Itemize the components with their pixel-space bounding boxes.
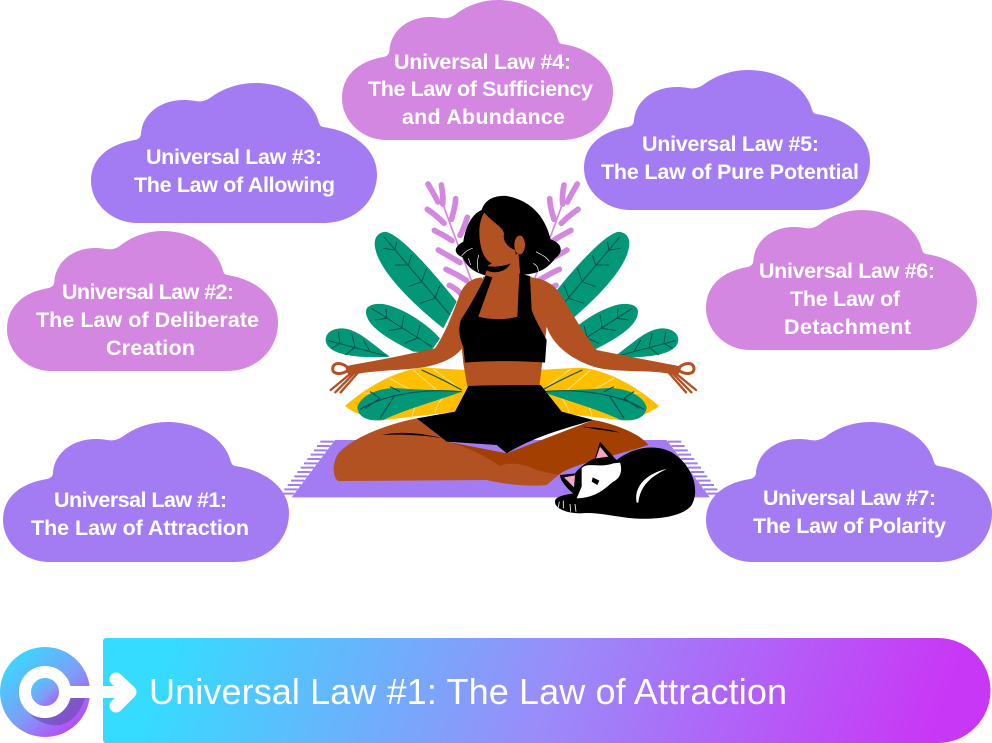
cloud: Universal Law #2: Universal Law #2: [62, 280, 234, 304]
cloud: Universal Law #6: Universal Law #6: [759, 259, 935, 283]
cloud: Universal Law #1 [3, 422, 289, 562]
cloud: Universal Law #3: The Law of Allowing [134, 173, 335, 197]
cat [555, 442, 695, 519]
cloud: Universal Law #1: The Law of Attraction [31, 516, 249, 540]
cloud: Universal Law #2: The Law of Deliberate [36, 308, 259, 332]
cloud: Universal Law #7: Universal Law #7: [763, 486, 936, 510]
rug [281, 440, 721, 497]
cloud: Universal Law #4 [342, 0, 613, 140]
illustration: woman meditating with plants, rug and cat [281, 184, 721, 519]
cloud: Universal Law #6: Detachment [784, 315, 911, 339]
cloud: Universal Law #3 [91, 83, 377, 223]
cloud: Universal Law #2: Creation [106, 336, 195, 360]
cloud: Universal Law #5 [584, 70, 870, 210]
cloud: Universal Law #3: Universal Law #3: [146, 145, 322, 169]
cloud: Universal Law #7 [706, 422, 992, 562]
cloud: Universal Law #4: and Abundance [402, 105, 565, 129]
cloud: Universal Law #6 [706, 210, 977, 350]
cloud: Universal Law #4: Universal Law #4: [394, 50, 571, 74]
cloud: Universal Law #2 [7, 231, 278, 371]
banner: current law title: Universal Law #1: The Law of Attraction [149, 671, 787, 712]
banner: current law title [103, 638, 990, 743]
tropical leaves [326, 232, 678, 421]
cloud: Universal Law #6: The Law of [790, 287, 901, 311]
lilac branches [427, 184, 578, 295]
cloud: Universal Law #5: Universal Law #5: [642, 132, 819, 156]
cloud: Universal Law #7: The Law of Polarity [753, 514, 946, 538]
cloud: Universal Law #1: Universal Law #1: [54, 488, 227, 512]
icon: logo ring with arrow [0, 647, 130, 737]
woman [331, 196, 696, 486]
cloud: Universal Law #5: The Law of Pure Potential [601, 160, 859, 184]
cloud: Universal Law #4: The Law of Sufficiency [368, 77, 593, 101]
